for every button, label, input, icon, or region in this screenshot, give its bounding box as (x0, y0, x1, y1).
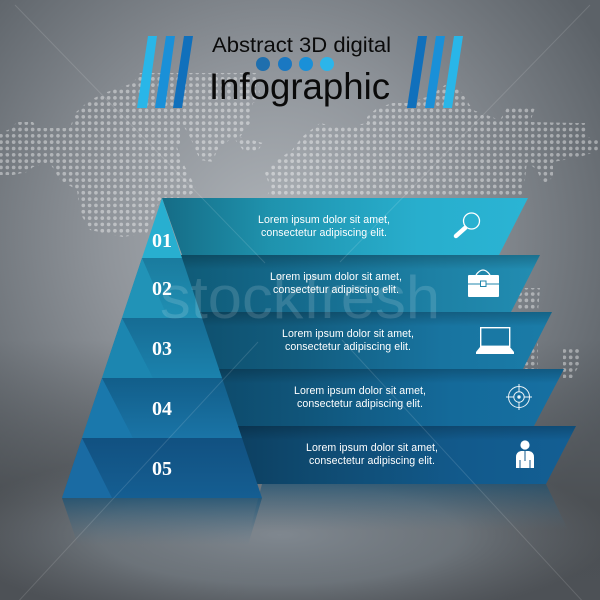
band 4 text: consectetur adipiscing elit. (297, 398, 423, 410)
band 5 text: consectetur adipiscing elit. (309, 455, 435, 467)
tier 2 (122, 258, 202, 318)
pyramid contact shadow (65, 482, 255, 514)
number 04: 04 (152, 398, 172, 420)
band 5 (200, 426, 576, 484)
title: Abstract 3D digital: Abstract 3D digital (212, 33, 391, 57)
icon: target (506, 384, 532, 410)
number 02: 02 (152, 278, 172, 300)
icon: magnifier (456, 213, 480, 236)
tier 1 (142, 198, 182, 258)
band 2 text: consectetur adipiscing elit. (273, 284, 399, 296)
band 2 text: Lorem ipsum dolor sit amet, (270, 271, 402, 283)
band 5 text: Lorem ipsum dolor sit amet, (306, 442, 438, 454)
icon: laptop (476, 328, 514, 354)
band 4 text: Lorem ipsum dolor sit amet, (294, 385, 426, 397)
watermark: stockfresh (160, 264, 440, 331)
number 01: 01 (152, 230, 172, 252)
band 3 (185, 312, 552, 369)
floor reflection of pyramid (62, 498, 262, 545)
tier 5 (62, 438, 262, 498)
icon: person (516, 440, 534, 468)
right decorative stripes (407, 36, 463, 108)
band 2 (175, 255, 540, 312)
left decorative stripes (137, 36, 193, 108)
pyramid (62, 198, 262, 498)
title: Infographic: Infographic (209, 66, 390, 107)
tier 4 (82, 378, 242, 438)
icon: briefcase (468, 270, 499, 297)
band 3 text: consectetur adipiscing elit. (285, 341, 411, 353)
band 1 text: consectetur adipiscing elit. (261, 227, 387, 239)
number 03: 03 (152, 338, 172, 360)
floor reflection of bar (250, 484, 568, 530)
number 05: 05 (152, 458, 172, 480)
band 1 (162, 198, 528, 255)
tier 3 (102, 318, 222, 378)
band 3 text: Lorem ipsum dolor sit amet, (282, 328, 414, 340)
dotted world map (1, 72, 600, 376)
band 1 text: Lorem ipsum dolor sit amet, (258, 214, 390, 226)
band 4 (190, 369, 564, 426)
four coloured dots (256, 57, 334, 71)
